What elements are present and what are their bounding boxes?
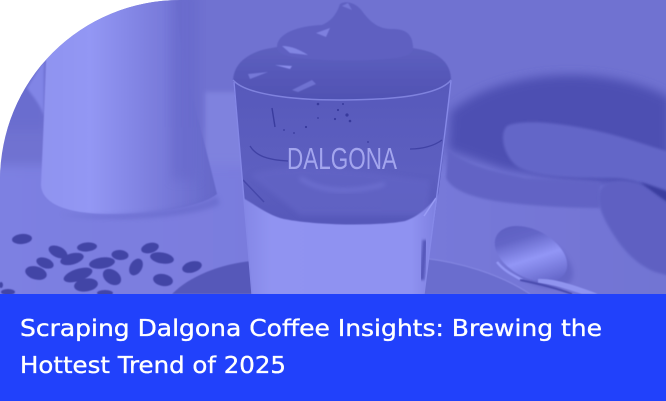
towel dark back fold	[448, 75, 666, 190]
title banner	[0, 294, 666, 401]
whipped foam peak	[277, 2, 413, 48]
foam highlights	[248, 3, 352, 92]
foam rim	[233, 43, 451, 100]
saucer	[172, 258, 530, 294]
photo background wall	[0, 0, 666, 178]
towel upper fold	[503, 122, 666, 192]
title text	[20, 314, 602, 379]
coffee swirls	[250, 167, 430, 215]
white jug in the background	[27, 0, 220, 219]
folded towel on the right	[446, 75, 666, 276]
glass side reflections	[422, 240, 425, 280]
wall panel behind the glass	[205, 92, 240, 165]
coffee beans scattered on the table	[0, 233, 203, 296]
spoon	[494, 226, 597, 294]
dark area left of the jug	[6, 60, 46, 134]
hero photo: dalgona coffee glass on a table	[0, 0, 666, 315]
DALGONA lettering on the glass: DALGONA	[287, 141, 397, 176]
title text: Scraping Dalgona Coffee Insights: Brewing the	[20, 314, 602, 342]
glass markings	[250, 146, 288, 161]
coffee layer	[233, 82, 450, 225]
table surface	[0, 162, 436, 294]
glass edges	[234, 82, 252, 294]
glass contents	[233, 82, 450, 294]
towel front fold	[599, 181, 666, 276]
milk layer	[244, 195, 438, 294]
coffee speckles	[283, 103, 369, 143]
towel lower roll	[446, 150, 600, 208]
glass of dalgona coffee	[225, 2, 460, 300]
title text: Hottest Trend of 2025	[20, 351, 286, 379]
